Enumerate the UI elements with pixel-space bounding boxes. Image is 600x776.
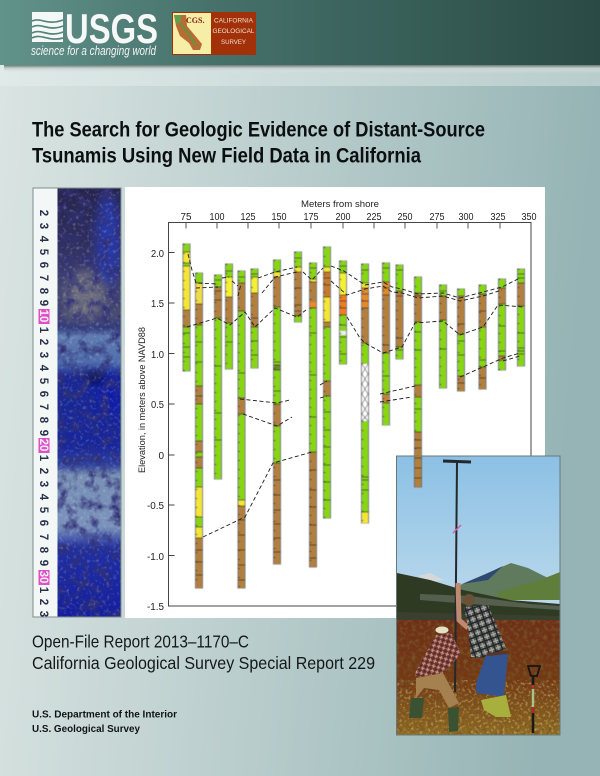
title: The Search for Geologic Evidence of Distant-Source <box>32 118 485 142</box>
y axis labels: 1.5 <box>151 299 164 310</box>
y axis labels: 1.0 <box>151 350 164 361</box>
x axis labels: 100 <box>210 212 225 223</box>
logo: USGS <box>31 5 158 58</box>
agency name: SURVEY <box>221 39 246 46</box>
core 1 <box>182 244 190 372</box>
y axis labels: 2.0 <box>151 249 164 260</box>
x axis labels: 125 <box>240 212 256 223</box>
shovel <box>528 666 540 733</box>
ruler: 7 <box>37 275 49 281</box>
ruler: 4 <box>37 494 49 501</box>
mountain <box>460 563 547 598</box>
y axis labels: -1.0 <box>147 552 164 563</box>
ruler <box>34 188 58 617</box>
dashed correlation lines <box>187 254 524 537</box>
agency name: CALIFORNIA <box>214 18 254 24</box>
core 14 <box>396 264 404 360</box>
core sample <box>58 188 123 616</box>
ruler: 30 <box>37 571 49 583</box>
core 5 <box>238 270 246 588</box>
report numbers: California Geological Survey Special Report 229 <box>32 653 375 673</box>
y axis title: Elevation, in meters above NAVD88 <box>137 327 148 473</box>
ruler: 3 <box>37 611 49 617</box>
x axis labels: 275 <box>430 212 445 223</box>
y axis labels: -0.5 <box>147 501 164 512</box>
x axis labels: 150 <box>272 212 287 223</box>
core 19 <box>498 278 506 370</box>
x axis labels: 250 <box>398 212 413 223</box>
x axis labels: 325 <box>490 212 506 223</box>
ruler: 4 <box>37 365 49 372</box>
core 15 lower section over photo <box>414 456 422 488</box>
panel: stratigraphic chart <box>125 187 545 618</box>
ruler: 8 <box>37 417 49 424</box>
coring pole <box>455 462 457 692</box>
ruler: 5 <box>37 249 49 256</box>
tagline: science for a changing world <box>31 44 157 58</box>
core 16 <box>439 284 447 388</box>
ruler: 3 <box>37 223 49 229</box>
ruler: 3 <box>37 352 49 358</box>
core 7 <box>273 260 281 564</box>
header band <box>0 0 600 86</box>
core 9 <box>309 262 317 568</box>
ruler: 5 <box>37 507 49 514</box>
ruler: 8 <box>37 547 49 554</box>
ruler: 10 <box>37 310 49 322</box>
x axis labels: 300 <box>458 212 474 223</box>
ruler: 2 <box>37 339 49 345</box>
USGS wordmark: USGS <box>65 5 158 52</box>
title: Tsunamis Using New Field Data in California <box>32 144 421 168</box>
ruler: 2 <box>37 599 49 605</box>
x axis labels: 350 <box>522 212 537 223</box>
x axis labels: 225 <box>366 212 382 223</box>
ruler: 1 <box>37 587 49 594</box>
core 20 <box>517 268 525 366</box>
core 3 <box>214 274 222 480</box>
ruler: 2 <box>37 468 49 474</box>
ruler: 6 <box>37 262 49 268</box>
ruler: 9 <box>37 430 49 436</box>
icon: California map <box>174 15 202 50</box>
y axis labels: -1.5 <box>147 602 164 613</box>
ruler: 5 <box>37 378 49 385</box>
core 13 <box>382 262 390 426</box>
ruler: 9 <box>37 300 49 306</box>
photo: field team coring in marsh <box>397 456 560 735</box>
x axis title: Meters from shore <box>301 199 379 210</box>
core 11 <box>339 260 347 364</box>
issuing agency <box>32 708 177 735</box>
ruler: 8 <box>37 288 49 295</box>
icon: USGS wave mark <box>32 12 63 42</box>
person right <box>458 583 511 717</box>
ruler: 7 <box>37 534 49 540</box>
x axis labels: 175 <box>304 212 319 223</box>
ruler: 2 <box>37 210 49 216</box>
title <box>32 118 485 168</box>
core 2 <box>195 272 203 588</box>
core 18 <box>478 284 486 390</box>
logo: California Geological Survey <box>172 12 256 55</box>
x axis labels: 75 <box>180 212 192 223</box>
ruler: 6 <box>37 391 49 397</box>
logo: California Geological Survey: CGS. <box>186 16 204 25</box>
y axis labels: 0.5 <box>151 400 164 411</box>
issuing agency: U.S. Geological Survey <box>32 723 140 735</box>
ruler: 1 <box>37 455 49 462</box>
x axis labels: 200 <box>336 212 351 223</box>
x axis labels <box>180 212 537 223</box>
issuing agency: U.S. Department of the Interior <box>32 708 177 720</box>
core 6 <box>250 268 258 368</box>
ruler: 7 <box>37 404 49 410</box>
person left <box>409 626 461 732</box>
ruler: 20 <box>37 439 49 451</box>
core side ticks <box>184 244 518 588</box>
sediment core photo with ruler <box>32 188 123 618</box>
report numbers: Open-File Report 2013–1170–C <box>32 632 249 652</box>
ruler: 6 <box>37 520 49 526</box>
marsh field <box>397 620 560 735</box>
y axis labels: 0 <box>158 451 164 462</box>
core 4 <box>225 264 233 370</box>
core 12 <box>361 264 369 524</box>
ruler: 3 <box>37 481 49 487</box>
core 8 <box>294 252 302 322</box>
agency name <box>212 18 255 46</box>
agency name: GEOLOGICAL <box>212 28 255 35</box>
core 17 <box>457 288 465 392</box>
ruler: 9 <box>37 560 49 566</box>
y axis labels <box>147 249 164 613</box>
hills <box>397 573 560 616</box>
core 10 <box>323 246 331 518</box>
ruler: 4 <box>37 236 49 243</box>
core columns <box>182 244 525 588</box>
report numbers <box>32 632 375 673</box>
ruler: 1 <box>37 327 49 334</box>
core 15 <box>414 276 422 457</box>
axis frame <box>168 222 531 606</box>
